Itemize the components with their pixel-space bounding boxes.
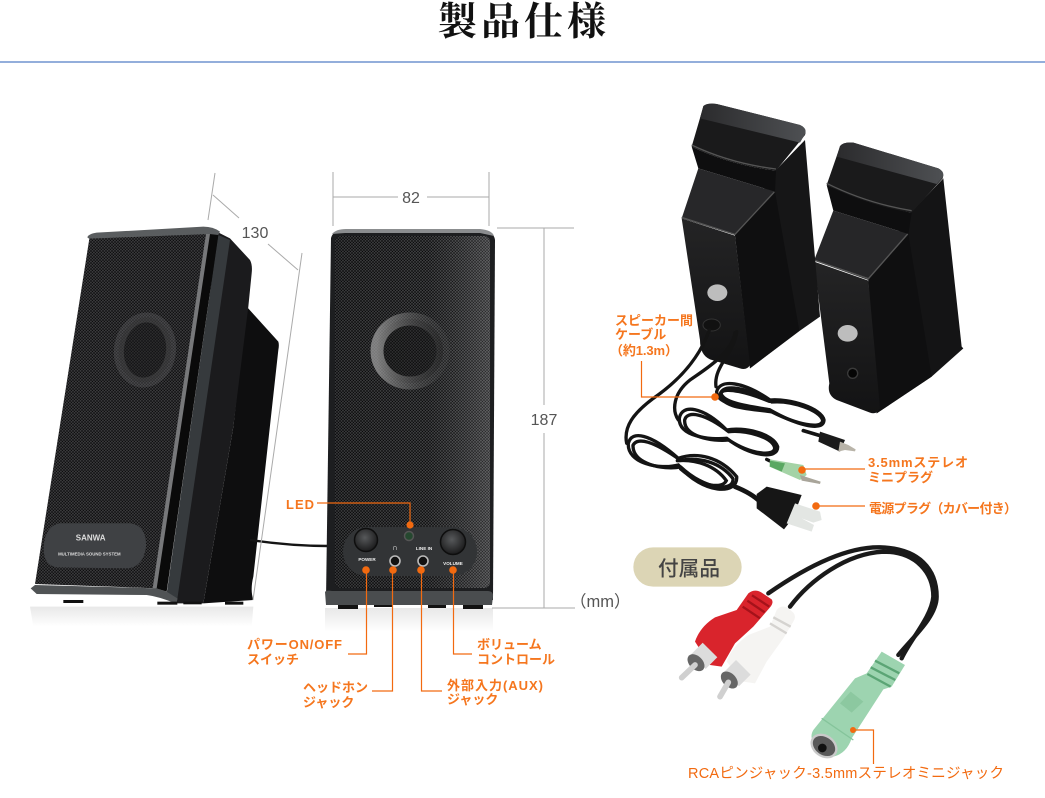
- dimension: height 187: 187: [531, 412, 557, 429]
- badge: [44, 523, 146, 568]
- green stereo jack: [807, 652, 905, 762]
- base: [325, 591, 493, 605]
- callout: headphone jack: ジャック: [303, 695, 354, 710]
- title: 製品仕様: [438, 1, 610, 44]
- sticker: [707, 284, 727, 301]
- accessory pill: [633, 547, 742, 587]
- badge: SANWA: [76, 534, 106, 543]
- right speaker: [814, 142, 963, 413]
- power plug: [757, 487, 822, 532]
- callout: external input: ジャック: [447, 692, 498, 707]
- left speaker: [682, 104, 820, 369]
- front speaker: [325, 229, 495, 632]
- link cable: [250, 540, 328, 546]
- rear view photo: [626, 104, 963, 532]
- cable grommet: [703, 319, 720, 331]
- rear housing: [203, 307, 279, 603]
- accessory photo: [633, 547, 937, 762]
- callout: headphone jack: ヘッドホン: [303, 680, 368, 695]
- feet: [63, 600, 243, 605]
- dimension: height 187: [492, 228, 575, 608]
- driver ring: [377, 319, 443, 383]
- dimension: width 82: 82: [402, 190, 420, 207]
- top edge: [87, 227, 220, 239]
- base: [31, 585, 177, 604]
- callout: power plug: 電源プラグ（カバー付き）: [869, 501, 1017, 516]
- side housing: [177, 232, 252, 603]
- white RCA plug: [718, 607, 795, 697]
- grille shading: [335, 236, 490, 588]
- callout: power switch: スイッチ: [247, 652, 299, 667]
- side highlight strip: [167, 235, 230, 603]
- title rule: [0, 61, 1045, 63]
- callout: headphone jack: [303, 566, 397, 710]
- unit label: （mm）: [570, 592, 630, 611]
- callout: RCA adapter: [688, 727, 1004, 782]
- coil three: [628, 436, 760, 502]
- panel labels: LINE IN: [416, 546, 433, 551]
- sticker: [838, 325, 858, 342]
- dimension: depth 130: 130: [242, 225, 268, 242]
- red RCA plug: [682, 591, 773, 678]
- dimension: depth 130: [208, 173, 302, 600]
- callout: volume: ボリューム: [477, 637, 542, 652]
- grille: [335, 236, 490, 588]
- control panel: [343, 527, 477, 576]
- RCA plug: [818, 432, 856, 452]
- accessory pill: 付属品: [658, 557, 720, 580]
- grille dark side: [156, 234, 218, 592]
- callout: LED: LED: [286, 497, 314, 512]
- callout: speaker cable: ケーブル: [615, 327, 666, 342]
- callout: volume: コントロール: [477, 652, 555, 667]
- callout: RCA adapter: RCAピンジャック-3.5mmステレオミニジャック: [688, 765, 1004, 782]
- callout: 3.5mm plug: ミニプラグ: [868, 470, 933, 485]
- coil one: [717, 384, 824, 437]
- panel labels: [358, 543, 463, 566]
- panel labels: ∩: [392, 543, 398, 552]
- callout: external input: 外部入力(AUX): [447, 678, 543, 693]
- panel labels: POWER: [358, 557, 376, 562]
- top edge: [332, 229, 494, 236]
- badge: MULTIMEDIA SOUND SYSTEM: [58, 551, 121, 556]
- LED: [404, 532, 414, 540]
- headphone jack: [390, 556, 400, 566]
- green mini plug: [769, 459, 821, 484]
- callout: 3.5mm plug: [798, 455, 968, 485]
- panel labels: VOLUME: [443, 561, 463, 566]
- stereo jack: [848, 368, 858, 378]
- callout: external input: [417, 566, 543, 707]
- driver ring: [115, 314, 175, 386]
- reflection: [30, 607, 253, 627]
- callout: LED: [286, 497, 414, 529]
- coil two: [679, 409, 778, 463]
- line-in jack: [418, 556, 428, 566]
- feet: [338, 605, 483, 609]
- grille: [35, 234, 210, 588]
- callout: power switch: パワーON/OFF: [247, 637, 342, 652]
- callout: speaker cable: [610, 313, 719, 401]
- wires: [768, 547, 937, 658]
- callout: volume: [449, 566, 555, 667]
- reflection: [325, 608, 493, 632]
- callout: power switch: [247, 566, 370, 667]
- power knob: [354, 528, 378, 552]
- grille bright edge: [153, 234, 210, 588]
- callout: speaker cable: スピーカー間: [615, 313, 693, 328]
- volume knob: [440, 530, 466, 554]
- cables: [626, 330, 824, 502]
- housing: [326, 230, 495, 600]
- callout: 3.5mm plug: 3.5mmステレオ: [868, 455, 968, 470]
- callout: speaker cable: （約1.3m）: [610, 343, 678, 358]
- left speaker, angled view: [30, 227, 279, 627]
- dimension: width 82: [333, 172, 489, 226]
